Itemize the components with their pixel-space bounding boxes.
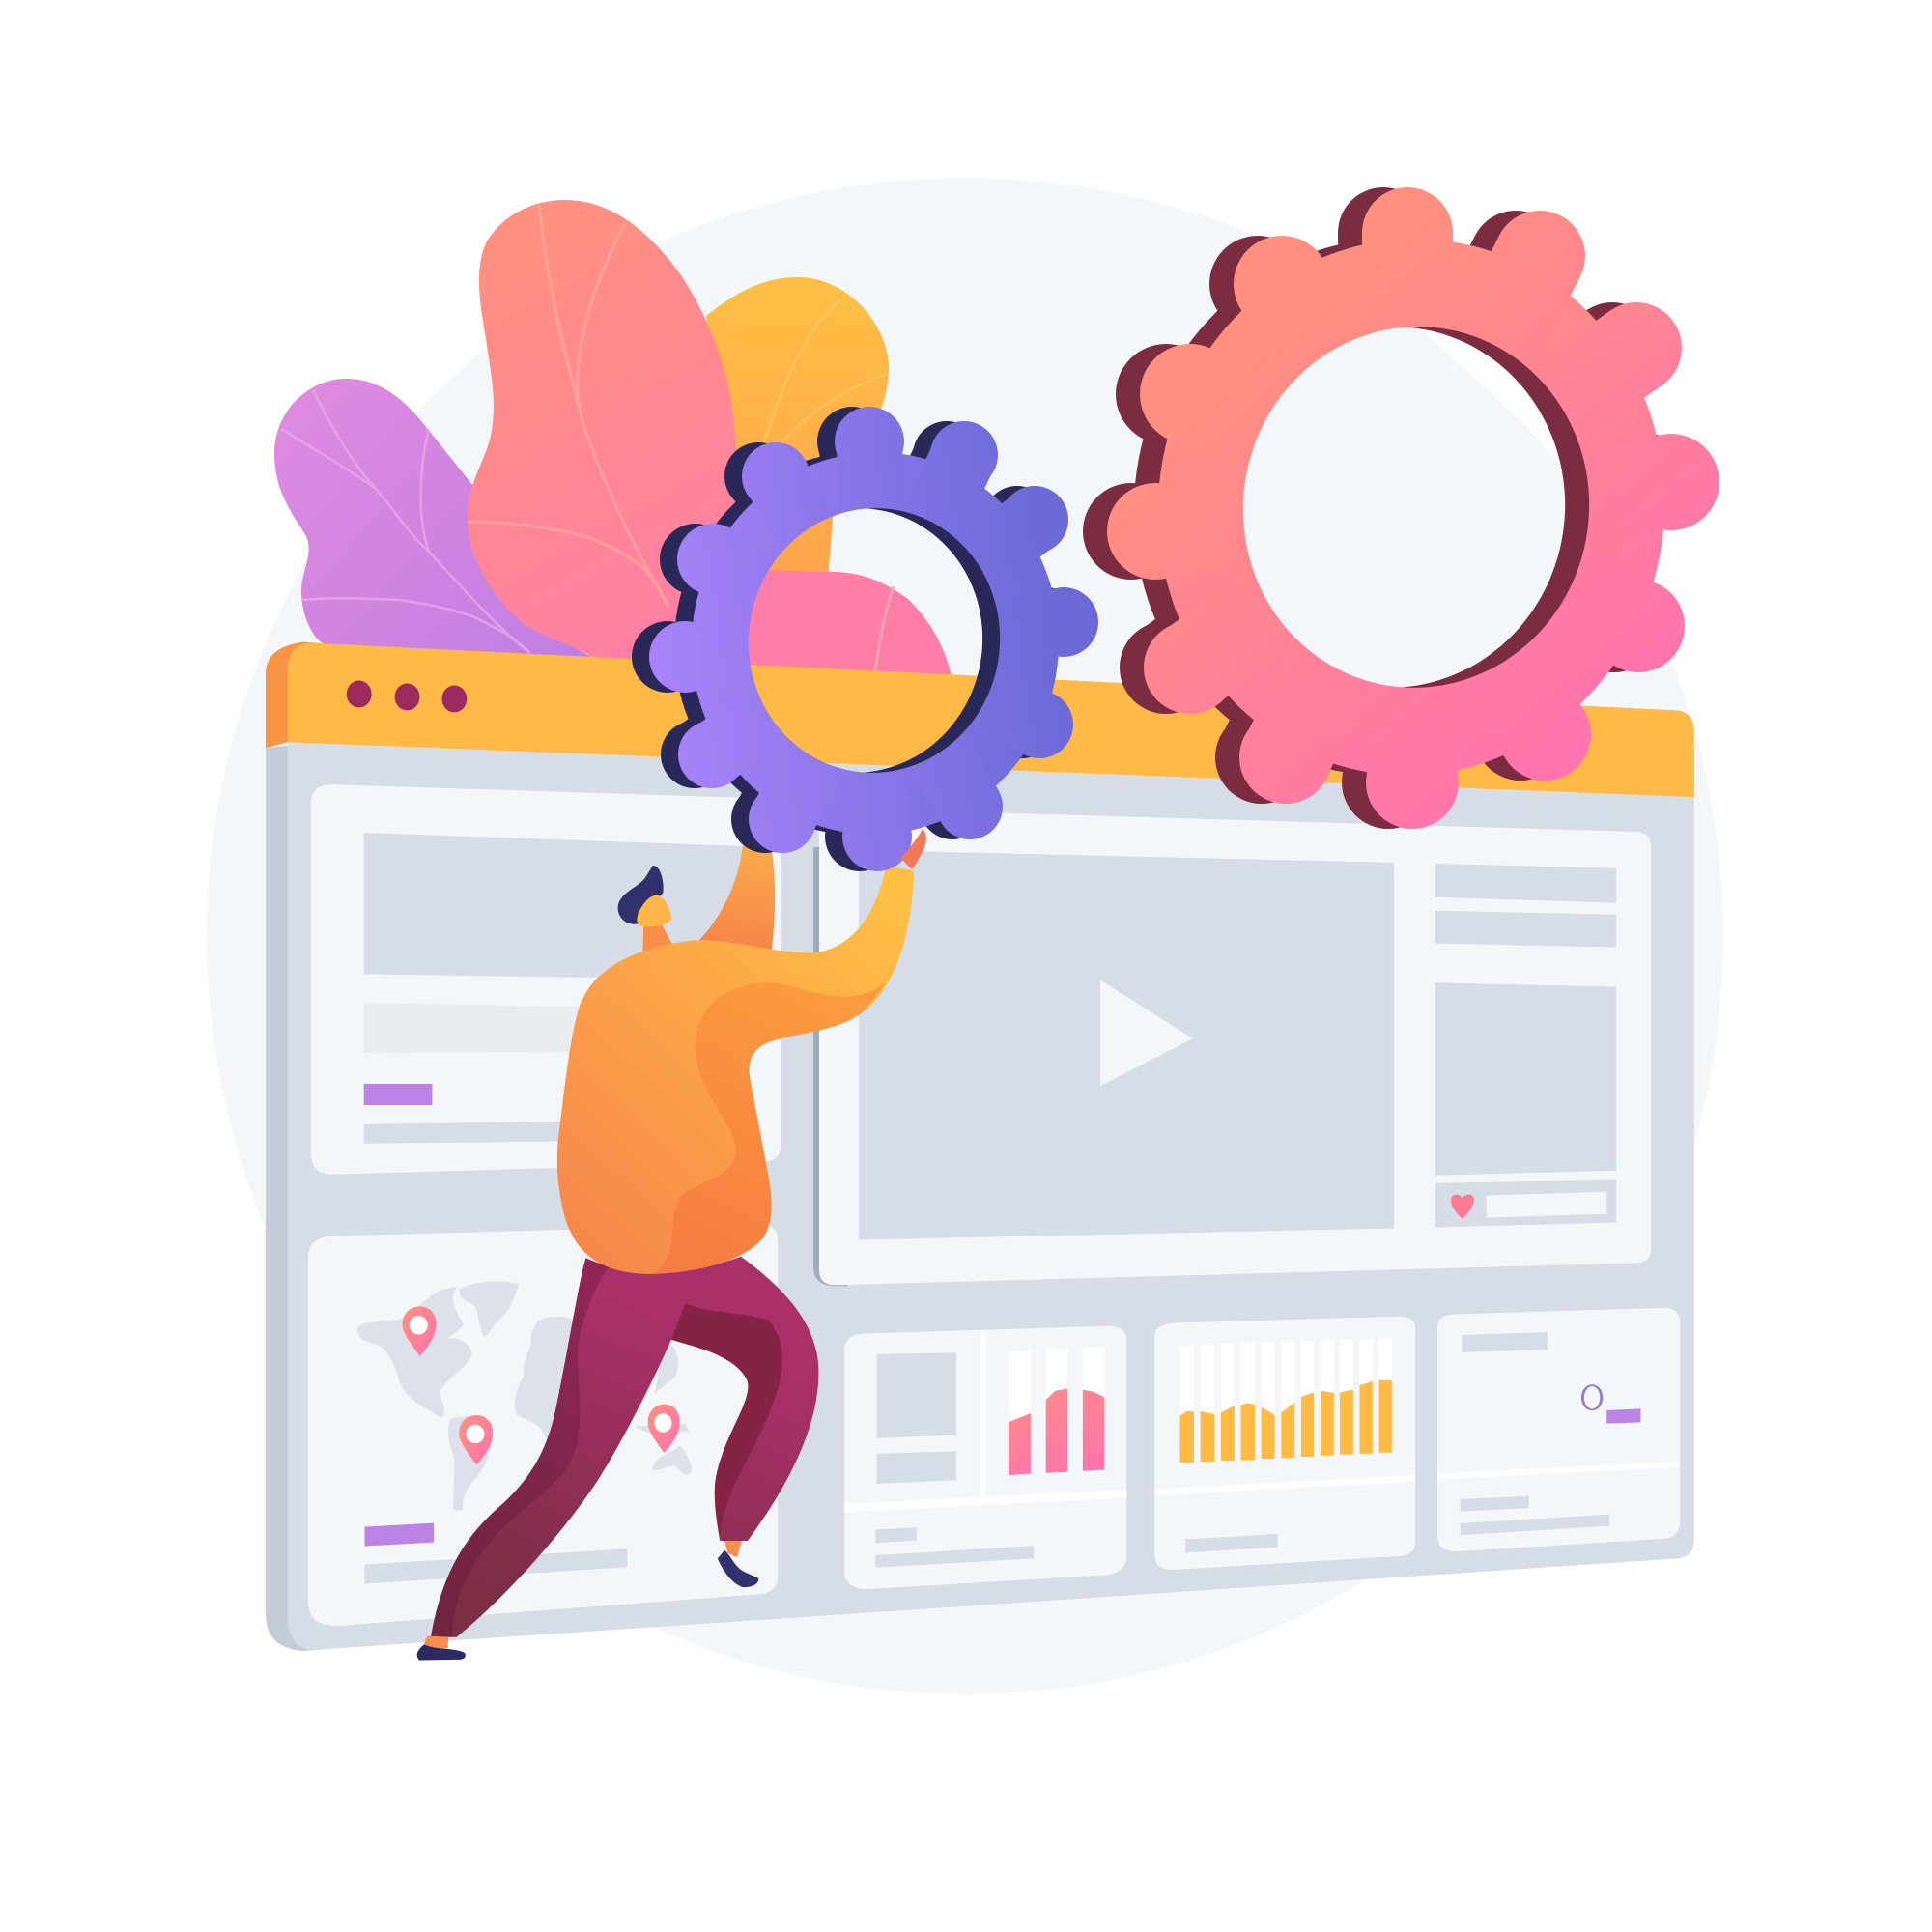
map pins xyxy=(364,1306,680,1583)
neck xyxy=(642,921,672,953)
pants shadow back leg xyxy=(671,1303,782,1541)
like row text slot xyxy=(1487,1192,1606,1218)
window side edge xyxy=(266,741,327,1651)
gear face xyxy=(1107,187,1719,829)
side thumbnail xyxy=(1435,982,1616,1176)
front ankle xyxy=(423,1636,448,1648)
map purple tag xyxy=(364,1523,434,1547)
bottom cards xyxy=(844,1308,1680,1589)
gear depth layer xyxy=(632,407,1081,871)
hair xyxy=(618,866,664,924)
leaf: purple xyxy=(274,379,595,659)
panel: video player xyxy=(819,808,1651,1285)
browser window xyxy=(266,642,1694,1651)
article text line xyxy=(364,1121,616,1144)
window body xyxy=(288,742,1694,1650)
back shoe xyxy=(718,1550,758,1587)
gear depth layer xyxy=(1083,187,1695,829)
leaf: pink large xyxy=(468,200,750,667)
leaf: yellow xyxy=(706,277,889,580)
pin: south america xyxy=(459,1415,493,1465)
window header bar xyxy=(288,643,1694,797)
window header side xyxy=(266,642,318,748)
back arm xyxy=(699,843,775,950)
panel: yellow chart card xyxy=(1154,1317,1415,1570)
side list item one xyxy=(1435,864,1616,903)
video area xyxy=(859,850,1394,1239)
side list item two xyxy=(1435,911,1616,948)
front shoe xyxy=(417,1644,466,1660)
pin: north america xyxy=(403,1306,436,1356)
pink bar chart xyxy=(1009,1347,1104,1475)
window dots xyxy=(347,681,467,712)
panel: stats card xyxy=(1437,1308,1680,1551)
sweater shadow xyxy=(653,981,887,1273)
article purple tag xyxy=(364,1084,432,1105)
sweater xyxy=(557,866,914,1274)
face xyxy=(637,895,671,926)
yellow bar chart xyxy=(1179,1338,1392,1463)
back ankle xyxy=(724,1541,742,1557)
background circle xyxy=(207,178,1723,1694)
video panel edge xyxy=(813,847,847,1286)
leaves group xyxy=(274,200,952,686)
pants shadow front leg xyxy=(431,1258,609,1637)
pin: australia xyxy=(648,1405,680,1453)
small purple gear xyxy=(632,407,1098,871)
panel: bar chart card xyxy=(844,1326,1126,1589)
pants xyxy=(431,1257,818,1637)
leaf: pink lobe seen through gear hole xyxy=(744,570,952,686)
world map xyxy=(357,1281,692,1510)
play icon xyxy=(1100,980,1193,1086)
panel: top-left article card xyxy=(311,784,781,1175)
white wedge behind large gear hole xyxy=(1419,327,1584,478)
gear face xyxy=(649,407,1098,871)
article subtitle block xyxy=(364,1003,616,1053)
map text line xyxy=(364,1548,627,1583)
large pink gear xyxy=(1083,187,1719,829)
like row xyxy=(1435,1180,1616,1228)
person hand xyxy=(900,829,926,869)
panel: world map card xyxy=(308,1225,778,1626)
article image placeholder xyxy=(364,833,770,980)
icon: heart xyxy=(1451,1195,1474,1219)
person xyxy=(417,843,914,1660)
